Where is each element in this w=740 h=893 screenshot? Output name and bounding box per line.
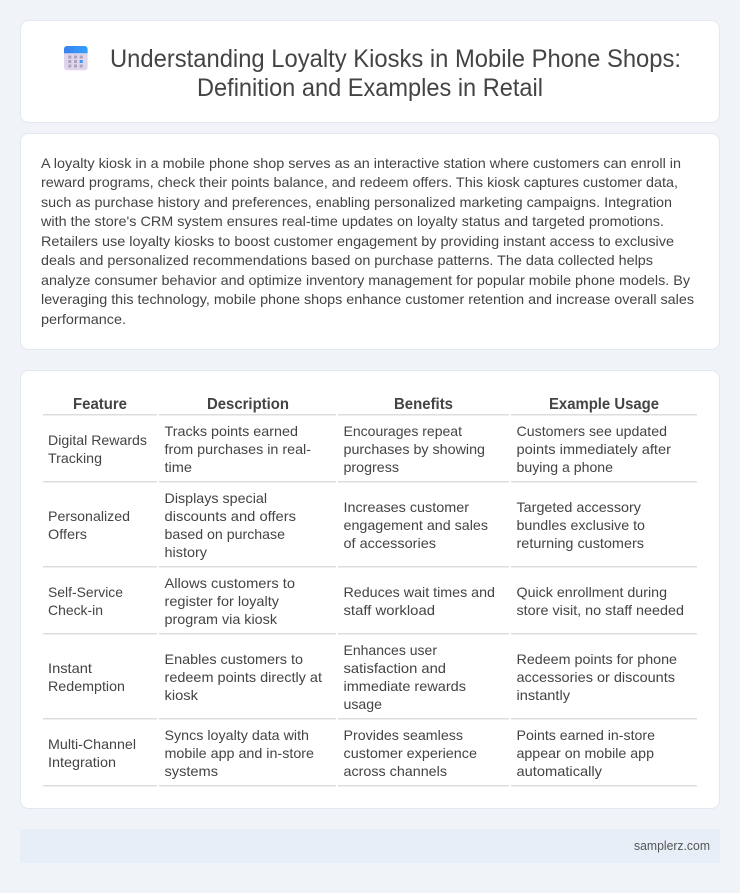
table row: Multi-Channel Integration: mobile app and in-store — [164, 745, 314, 761]
table row: Digital Rewards Tracking: Digital Rewards — [48, 432, 147, 448]
table header row: Example Usage — [549, 396, 659, 413]
table header row: Feature — [73, 396, 127, 413]
paragraph text: leveraging this technology, mobile phone shops enhance customer retention and increase overall sales — [41, 291, 694, 307]
paragraph text: A loyalty kiosk in a mobile phone shop serves as an interactive station where customers can enroll in — [41, 155, 681, 171]
table row: Multi-Channel Integration: Integration — [48, 754, 116, 770]
table row: Self-Service Check-in: program via kiosk — [164, 611, 278, 627]
table row: Digital Rewards Tracking: Tracks points earned — [164, 423, 298, 439]
table row: Personalized Offers: of accessories — [344, 535, 436, 551]
table row: Digital Rewards Tracking: Encourages repeat — [344, 423, 462, 439]
table row: Multi-Channel Integration: Provides seamless — [344, 727, 463, 743]
title: Understanding Loyalty Kiosks in Mobile Phone Shops: — [110, 45, 681, 73]
table row: Multi-Channel Integration: Syncs loyalty data with — [164, 727, 309, 743]
table row: Self-Service Check-in: Self-Service — [48, 584, 123, 600]
paragraph text: reward programs, check their points balance, and redeem offers. This kiosk captures customer data, — [41, 174, 678, 190]
table row: Instant Redemption: Instant — [48, 660, 92, 676]
table row: Multi-Channel Integration: Points earned in-store — [516, 727, 655, 743]
table row: Instant Redemption: instantly — [516, 687, 570, 703]
table row: Digital Rewards Tracking: Tracking — [48, 450, 102, 466]
paragraph text — [40, 155, 694, 327]
panel: feature table — [20, 370, 720, 808]
table row: Self-Service Check-in: Reduces wait times and — [344, 584, 495, 600]
table row: Digital Rewards Tracking: Customers see updated — [516, 423, 667, 439]
table row: Digital Rewards Tracking: time — [164, 459, 192, 475]
icon: calendar grid — [64, 46, 88, 70]
table row: Self-Service Check-in: register for loyalty — [164, 593, 279, 609]
table header row — [73, 396, 659, 413]
table row: Self-Service Check-in: Check-in — [48, 602, 103, 618]
paragraph text: deals and personalized recommendations based on purchase patterns. The data collected helps — [41, 252, 653, 268]
table row: Personalized Offers: Displays special — [164, 490, 267, 506]
table row: Digital Rewards Tracking: buying a phone — [516, 459, 613, 475]
table row: Personalized Offers: history — [164, 544, 207, 560]
table row: Digital Rewards Tracking: purchases by showing — [344, 441, 485, 457]
table row: Instant Redemption: accessories or discounts — [516, 669, 675, 685]
table row: Instant Redemption: Enables customers to — [164, 651, 303, 667]
table row: Personalized Offers: based on purchase — [164, 526, 285, 542]
table row: Multi-Channel Integration: customer experience — [344, 745, 477, 761]
table row: Personalized Offers: Targeted accessory — [516, 499, 641, 515]
table row: Instant Redemption: redeem points directly at — [164, 669, 322, 685]
table row: Digital Rewards Tracking: points immediately after — [516, 441, 671, 457]
paragraph text: analyze consumer behavior and optimize inventory management for popular mobile phone models. By — [41, 272, 690, 288]
table row: Instant Redemption: Redemption — [48, 678, 125, 694]
table row: Self-Service Check-in: staff workload — [344, 602, 435, 618]
table row: Multi-Channel Integration: automatically — [516, 763, 602, 779]
paragraph text: such as purchase history and preferences, enabling personalized marketing campaigns. Integration — [41, 194, 672, 210]
table row: Instant Redemption — [48, 642, 677, 712]
table row: Personalized Offers: returning customers — [516, 535, 644, 551]
table row: Multi-Channel Integration — [48, 727, 655, 779]
paragraph text: with the store's CRM system ensures real-time updates on loyalty status and targeted promotions. — [40, 213, 664, 229]
paragraph text: Retailers use loyalty kiosks to boost customer engagement by providing instant access to exclusive — [41, 233, 674, 249]
table row: Personalized Offers: bundles exclusive to — [516, 517, 645, 533]
table row: Instant Redemption: satisfaction and — [344, 660, 446, 676]
table header row: Description — [207, 396, 289, 413]
footer bar — [20, 829, 720, 863]
table row: Multi-Channel Integration: across channels — [344, 763, 447, 779]
table row: Personalized Offers: Increases customer — [344, 499, 469, 515]
table row: Personalized Offers: engagement and sales — [344, 517, 488, 533]
table row: Instant Redemption: Enhances user — [344, 642, 437, 658]
table row: Self-Service Check-in: store visit, no staff needed — [516, 602, 684, 618]
table row: Self-Service Check-in: Quick enrollment during — [516, 584, 667, 600]
table row: Multi-Channel Integration: Multi-Channel — [48, 736, 136, 752]
table row: Multi-Channel Integration: appear on mobile app — [516, 745, 654, 761]
table row: Digital Rewards Tracking — [48, 423, 671, 475]
title: Definition and Examples in Retail — [197, 74, 543, 102]
table row: Personalized Offers — [48, 490, 645, 560]
table row: Personalized Offers: Personalized — [48, 508, 130, 524]
table row: Self-Service Check-in: Allows customers to — [164, 575, 295, 591]
table row: Self-Service Check-in — [48, 575, 684, 627]
table row: Instant Redemption: kiosk — [164, 687, 199, 703]
title — [110, 45, 681, 102]
panel: intro paragraph — [20, 134, 720, 350]
footer source text: samplerz.com — [634, 839, 710, 853]
table row: Personalized Offers: discounts and offers — [164, 508, 296, 524]
table row: Multi-Channel Integration: systems — [164, 763, 218, 779]
panel: title card — [20, 20, 720, 122]
table header row: Benefits — [394, 396, 453, 413]
table row: Digital Rewards Tracking: progress — [344, 459, 399, 475]
paragraph text: performance. — [41, 311, 126, 327]
table row: Digital Rewards Tracking: from purchases in real- — [164, 441, 311, 457]
table row: Personalized Offers: Offers — [48, 526, 87, 542]
table row: Instant Redemption: Redeem points for phone — [516, 651, 677, 667]
table row: Instant Redemption: usage — [344, 696, 382, 712]
table row: Instant Redemption: immediate rewards — [344, 678, 466, 694]
